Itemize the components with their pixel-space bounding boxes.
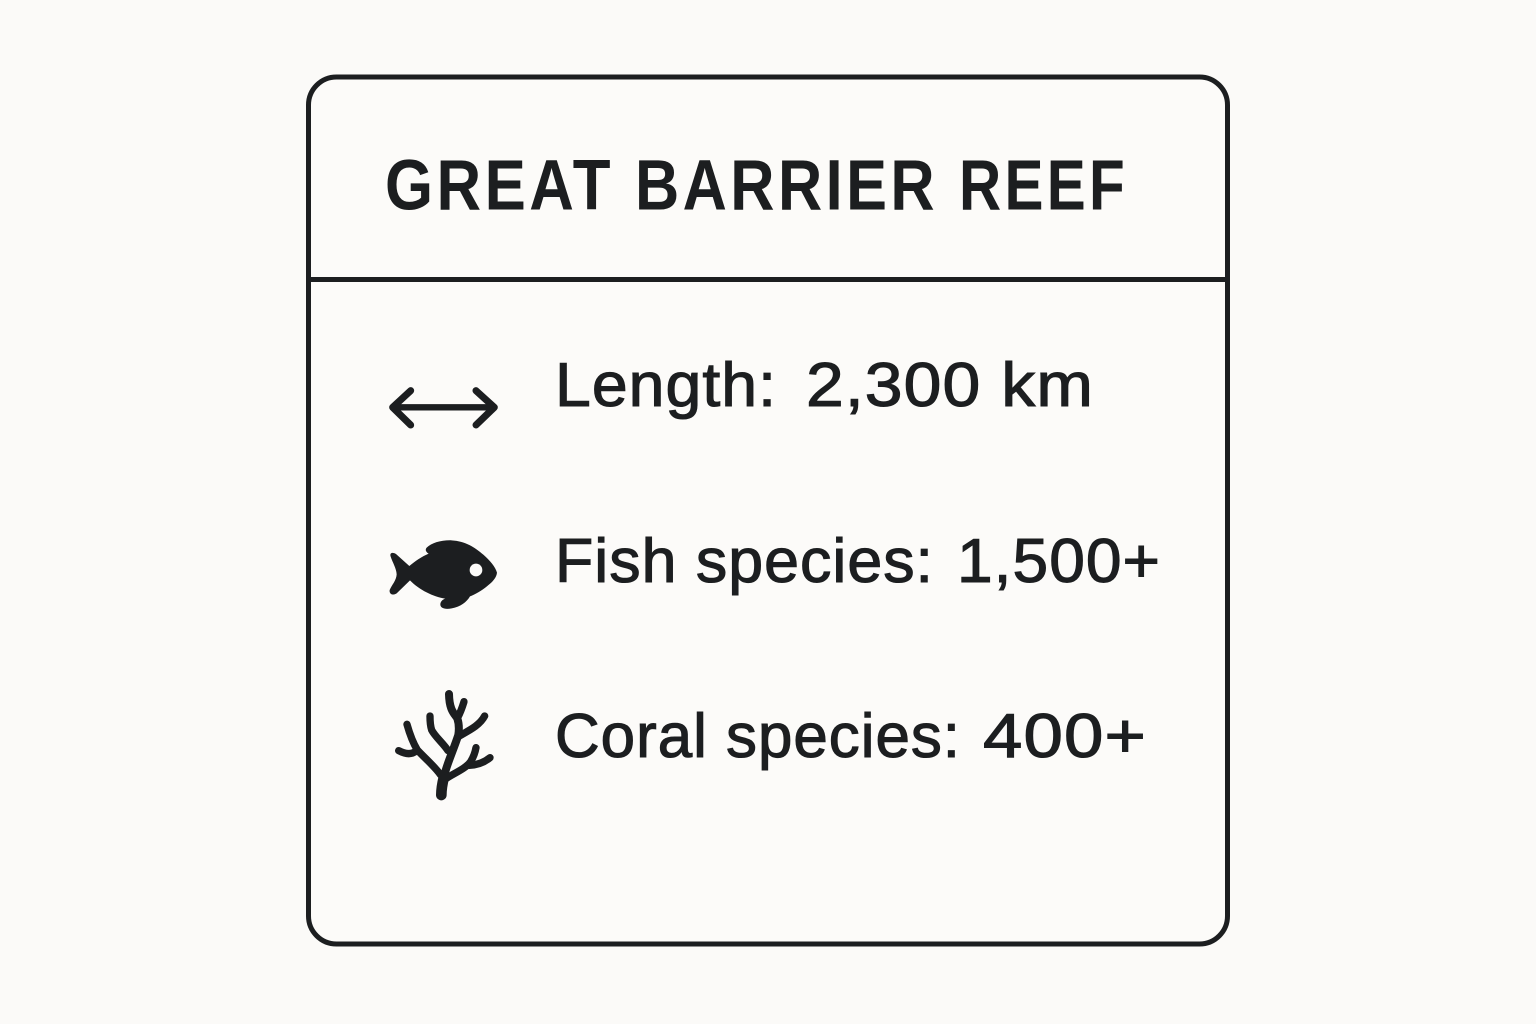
icon: double-headed arrow for length	[393, 391, 494, 425]
title: BARRIER	[635, 146, 938, 226]
icon: fish	[390, 540, 497, 609]
title: GREAT	[385, 146, 614, 226]
panel: fact card	[308, 77, 1228, 944]
text: coral species fact: 400+	[983, 702, 1147, 771]
title	[385, 146, 1128, 226]
icon: coral	[399, 694, 490, 796]
text: length fact: 2,300 km	[806, 351, 1094, 420]
text: length fact	[555, 351, 1094, 420]
text: coral species fact: Coral species:	[555, 702, 961, 771]
text: fish species fact	[555, 527, 1161, 596]
text: fish species fact: Fish species:	[555, 527, 934, 596]
text: fish species fact: 1,500+	[957, 527, 1161, 596]
title: REEF	[959, 146, 1128, 226]
text: length fact: Length:	[555, 351, 777, 420]
text: coral species fact	[555, 702, 1147, 771]
